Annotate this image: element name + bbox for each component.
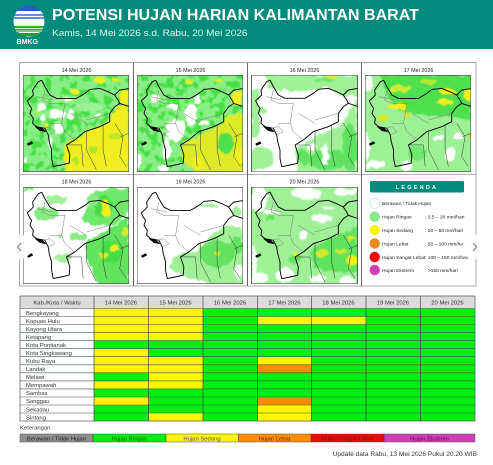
legend item: heavy rain: Hujan Lebat: [382, 242, 409, 248]
legend item: extreme rain: [370, 265, 458, 275]
table row labels: Kayong Utara: [26, 327, 63, 333]
legend item: cloudy: Berawan / Tidak Hujan: [382, 201, 431, 207]
legend item: moderate rain: : 20 – 50 mm/hari: [425, 228, 463, 234]
table header: 18 Mei 2026: [322, 300, 355, 306]
icon: carousel arrow left: [6, 234, 32, 260]
table header: 17 Mei 2026: [268, 300, 301, 306]
table header: Kab./Kota / Waktu: [33, 300, 81, 306]
table row labels: Kapuas Hulu: [26, 319, 60, 325]
panel: legend: [370, 181, 468, 275]
panel: map grid: [19, 62, 476, 286]
legend item: very heavy rain: [370, 252, 468, 262]
map: 19 Mei 2026: [137, 180, 244, 284]
table row labels: Sekadau: [26, 407, 49, 413]
map: 18 Mei 2026: [23, 180, 130, 284]
table: rainfall by regency: [20, 296, 475, 421]
table row labels: [20, 308, 94, 421]
legend item: extreme rain: Hujan Ekstrem: [382, 268, 414, 274]
map: 14 Mei 2026: [23, 68, 130, 172]
subtitle: Kamis, 14 Mei 2026 s.d. Rabu, 20 Mei 2026: [52, 28, 248, 39]
update note: Update data Rabu, 13 Mei 2026 Pukul 20.20 WIB: [333, 451, 478, 458]
legend item: light rain: : 0.5 – 20 mm/hari: [425, 214, 464, 220]
legend item: moderate rain: [370, 225, 463, 235]
legend item: heavy rain: : 50 – 100 mm/hari: [425, 242, 466, 248]
map: 16 Mei 2026: [247, 68, 358, 172]
key bar: Hujan Lebat: [259, 436, 291, 442]
table header: 20 Mei 2026: [431, 300, 464, 306]
map: 19 Mei 2026: 19 Mei 2026: [176, 180, 205, 186]
table row labels: Ketapang: [26, 335, 51, 341]
legend item: heavy rain: [370, 238, 466, 249]
table row labels: Bengkayang: [26, 311, 59, 317]
table header: 14 Mei 2026: [105, 300, 138, 306]
key bar: Hujan Ringan: [112, 436, 147, 442]
table row labels: Mempawah: [26, 383, 56, 389]
table row labels: Melawi: [26, 375, 44, 381]
header band: [0, 0, 493, 49]
legend item: light rain: Hujan Ringan: [382, 214, 412, 220]
key bar: Berawan / Tidak Hujan: [27, 436, 86, 442]
table row labels: Sambas: [26, 391, 48, 397]
map: 20 Mei 2026: [250, 180, 358, 285]
table header: [20, 296, 475, 308]
table row labels: Kubu Raya: [26, 359, 56, 365]
legend heading: LEGENDA: [396, 185, 438, 191]
map: 18 Mei 2026: 18 Mei 2026: [62, 180, 91, 186]
key bar: [20, 434, 475, 442]
key bar: Hujan Sangat Lebat: [321, 436, 374, 442]
legend item: very heavy rain: Hujan Sangat Lebat: [382, 255, 426, 261]
table row labels: Sintang: [26, 415, 46, 421]
legend item: very heavy rain: : 100 – 150 mm/hari: [425, 255, 468, 261]
key label: Keterangan :: [20, 426, 54, 432]
legend item: extreme rain: : >150 mm/hari: [425, 268, 458, 274]
table header: 16 Mei 2026: [214, 300, 247, 306]
icon: BMKG logo: BMKG: [16, 39, 38, 46]
table header: 15 Mei 2026: [159, 300, 192, 306]
key bar: Hujan Ekstrem: [410, 436, 449, 442]
legend item: light rain: [370, 212, 464, 222]
map: 17 Mei 2026: 17 Mei 2026: [404, 68, 433, 74]
table row labels: Sanggau: [26, 399, 50, 405]
title: POTENSI HUJAN HARIAN KALIMANTAN BARAT: [52, 7, 419, 24]
map: 15 Mei 2026: 15 Mei 2026: [176, 68, 205, 74]
map: 14 Mei 2026: 14 Mei 2026: [62, 68, 91, 74]
legend item: moderate rain: Hujan Sedang: [382, 228, 413, 234]
map: 15 Mei 2026: [136, 68, 244, 172]
table row labels: Landak: [26, 367, 45, 373]
table cells: [94, 308, 475, 421]
map: 16 Mei 2026: 16 Mei 2026: [290, 68, 319, 74]
key bar: Hujan Sedang: [183, 436, 221, 442]
icon: carousel arrow right: [462, 234, 488, 260]
map: 17 Mei 2026: [364, 68, 473, 172]
table header: 19 Mei 2026: [377, 300, 410, 306]
icon: BMKG logo: [14, 5, 44, 46]
table row labels: Kota Singkawang: [26, 351, 72, 357]
map: 20 Mei 2026: 20 Mei 2026: [290, 180, 319, 186]
table row labels: Kota Pontianak: [26, 343, 66, 349]
